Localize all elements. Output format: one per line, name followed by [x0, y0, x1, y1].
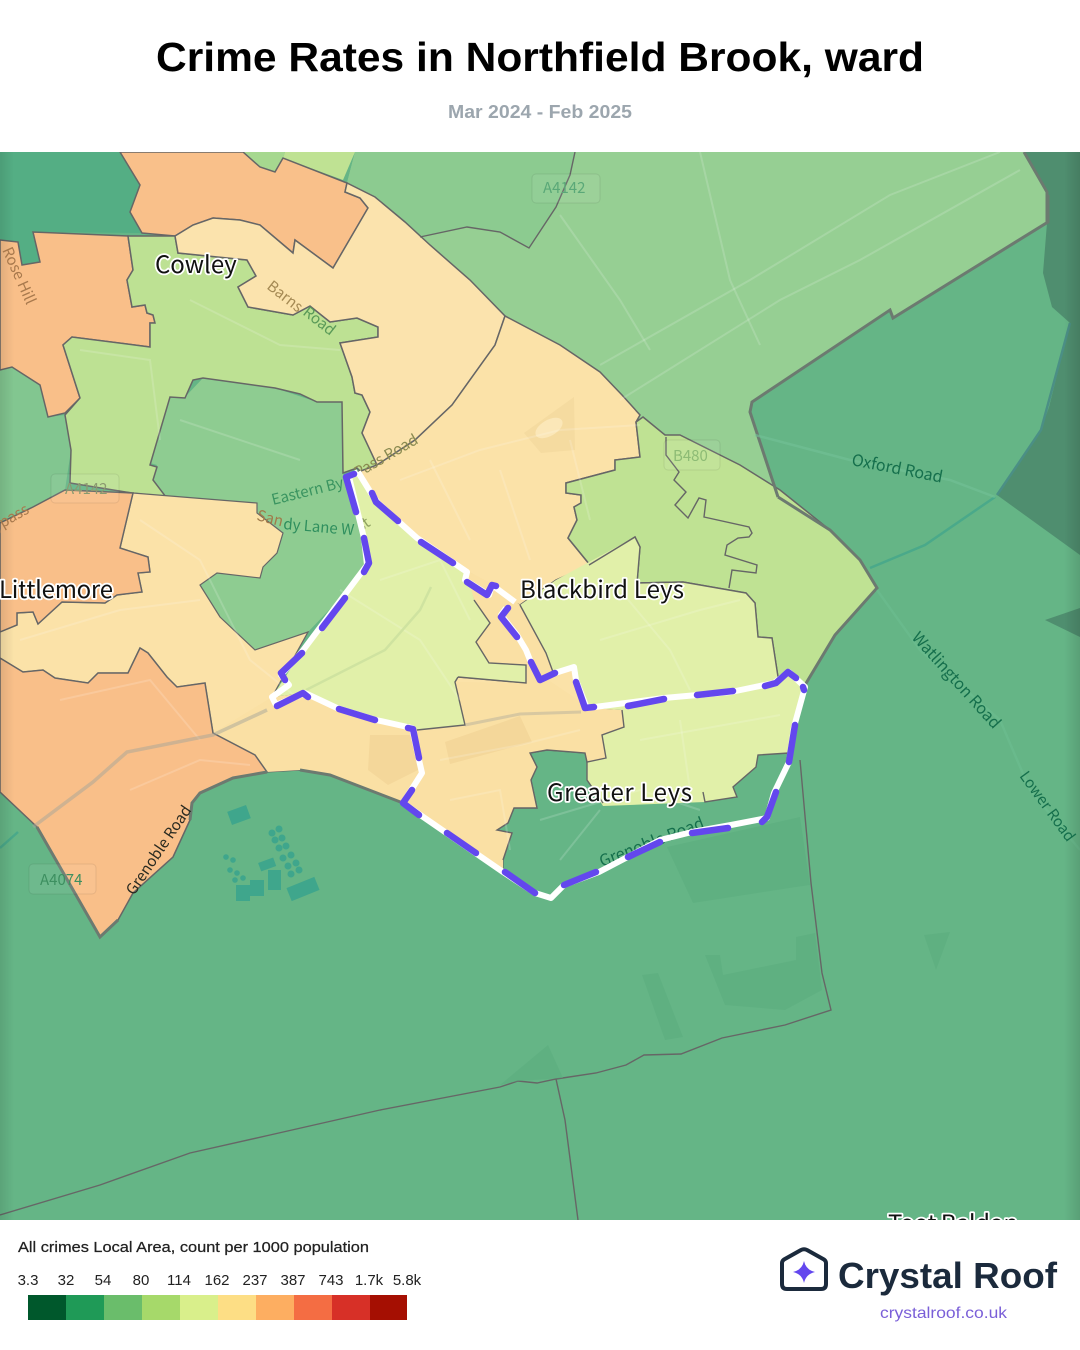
road labels: dy Lane W [283, 513, 355, 540]
area: west mid green ward [0, 367, 71, 523]
area: top sliver lime wards [283, 152, 355, 180]
map detail: darker field patches [512, 1077, 563, 1082]
legend colour bar [28, 1295, 407, 1320]
area: Cowley north orange ward [120, 152, 368, 268]
road labels: Watlington Road [907, 625, 1008, 733]
legend scale values [18, 1272, 422, 1289]
map detail: dual carriageway [33, 710, 267, 827]
boundary: southern field ward lines [0, 760, 831, 1215]
boundary: thick outer ward lines [37, 152, 1048, 937]
boundary: north ward lines [420, 152, 575, 248]
legend scale values: 32 [58, 1272, 74, 1289]
area: Littlemore orange ward [0, 490, 150, 632]
map detail: stream through ward [306, 587, 431, 690]
legend title: All crimes Local Area, count per 1000 population [18, 1239, 369, 1256]
map detail: carriageway east section [465, 712, 581, 725]
road labels: San [255, 504, 286, 531]
area: eastern lime ward [566, 417, 877, 685]
road labels: A4142 [543, 177, 585, 198]
legend scale values: 80 [133, 1272, 149, 1289]
area: yellow strip beside Blackbird Leys [468, 572, 552, 671]
area: Blackbird Leys light lime [520, 537, 805, 806]
map detail: central park hull [532, 398, 573, 452]
map base: low-crime green [0, 152, 1080, 1220]
area: Northfield Brook west light lime [272, 472, 526, 730]
legend scale values: 743 [318, 1272, 344, 1289]
area: central yellow ward [358, 315, 641, 604]
place label: Toot Baldon (clipped): Toot Baldon [888, 1204, 1018, 1239]
map detail: central park pond [536, 418, 562, 438]
area: darkest eastern ward [997, 152, 1080, 555]
map detail: rivers and waterways [0, 323, 1080, 850]
road labels: A4142 [65, 478, 107, 499]
area: southern yellow estate [218, 682, 624, 868]
road labels: A4074 [40, 869, 82, 890]
ward boundary: purple dashes [277, 474, 804, 893]
road labels: Eastern By [269, 472, 346, 510]
area: Rose Hill orange ward [0, 232, 155, 417]
legend scale values: 5.8k [393, 1272, 422, 1289]
road labels: st [352, 512, 374, 536]
map detail: farm buildings [223, 805, 320, 901]
legend scale values: 114 [167, 1272, 191, 1289]
logo: Crystal Roof [782, 1249, 1058, 1296]
place label: Cowley: Cowley [155, 245, 237, 280]
area: eastern dark wedge [1045, 608, 1080, 637]
area: north yellow ward [175, 183, 505, 465]
road labels: Oxford Road [850, 446, 945, 488]
area: southern orange ward [0, 648, 267, 937]
website link: crystalroof.co.uk [880, 1305, 1008, 1322]
road labels: Pass Road [350, 429, 422, 482]
legend scale values: 54 [95, 1272, 111, 1289]
road labels: Grenoble Road [121, 801, 196, 899]
title: Crime Rates in Northfield Brook, ward [156, 34, 924, 80]
map detail: shaded ground in yellow estate [368, 716, 532, 785]
legend scale values: 162 [204, 1272, 230, 1289]
road labels: Barns [263, 275, 308, 317]
area: top-left green ward [0, 152, 142, 265]
place label: Greater Leys: Greater Leys [547, 773, 692, 808]
legend scale values: 1.7k [355, 1272, 384, 1289]
area: northern light green industrial zone [347, 152, 1048, 497]
boundary: Blackbird Leys ward lines [0, 152, 831, 1220]
road labels: B480 [673, 445, 708, 466]
road labels: Lower Road [1015, 767, 1080, 846]
area: north mid green ward [347, 152, 575, 248]
road labels: Road [299, 301, 340, 340]
ward boundary: white outline main loop [272, 472, 805, 898]
area: centre mid green ward [150, 378, 372, 650]
legend scale values: 3.3 [18, 1272, 38, 1289]
road labels [0, 177, 1080, 899]
map edge shading [0, 152, 1080, 1220]
area: top small green ward [243, 152, 285, 172]
map detail: faint streets [20, 152, 1020, 860]
road labels: Grenoble Road [595, 810, 707, 872]
road shields [29, 174, 720, 894]
area: south-west yellow ward [0, 493, 624, 872]
legend scale values: 387 [280, 1272, 306, 1289]
subtitle: date range: Mar 2024 - Feb 2025 [448, 102, 632, 122]
logo wordmark: Crystal Roof [838, 1255, 1058, 1296]
area: Cowley lime ward [63, 236, 378, 497]
legend scale values: 237 [242, 1272, 268, 1289]
place label: Littlemore: Littlemore [0, 570, 113, 605]
place label: Blackbird Leys: Blackbird Leys [520, 570, 684, 605]
icon: house with star [782, 1249, 826, 1289]
